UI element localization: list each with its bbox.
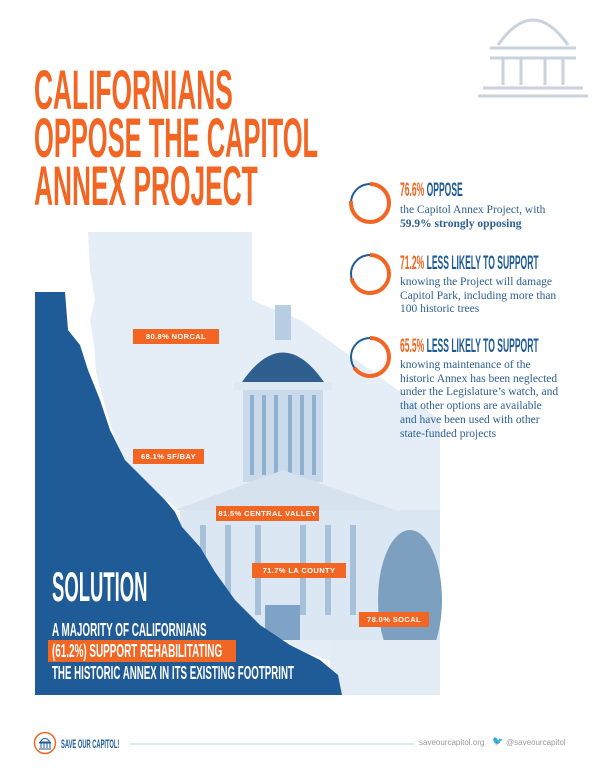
stat 1 xyxy=(349,180,546,230)
stat 2: knowing the Project will damage xyxy=(400,276,552,288)
title xyxy=(34,58,318,217)
stat 2: 71.2% LESS LIKELY TO SUPPORT xyxy=(400,253,539,274)
text: 71.7% LA COUNTY xyxy=(263,566,335,575)
map and capitol illustration xyxy=(35,232,442,695)
text: 78.0% SOCAL xyxy=(367,615,421,624)
solution text xyxy=(48,563,294,683)
stat 1: 76.6% OPPOSE xyxy=(400,180,463,201)
footer: @saveourcapitol xyxy=(506,738,566,747)
title: CALIFORNIANS xyxy=(34,58,233,121)
stat 3: under the Legislature’s watch, and xyxy=(400,386,558,398)
stat 3: historic Annex has been neglected xyxy=(400,373,557,385)
stat 3: and have been used with other xyxy=(400,414,540,426)
stat 3: state-funded projects xyxy=(400,428,496,440)
stat 3: knowing maintenance of the xyxy=(400,359,531,371)
solution text: (61.2%) SUPPORT REHABILITATING xyxy=(52,641,222,661)
solution text: THE HISTORIC ANNEX IN ITS EXISTING FOOTPRINT xyxy=(52,663,294,683)
stat 2 xyxy=(350,253,556,315)
stat 1: the Capitol Annex Project, with xyxy=(400,204,545,216)
region labels: 80.8% NORCAL xyxy=(146,332,206,341)
title: ANNEX PROJECT xyxy=(34,154,258,217)
region labels xyxy=(133,329,219,344)
stat 2: Capitol Park, including more than xyxy=(400,290,556,302)
footer: SAVE OUR CAPITOL! xyxy=(61,737,119,751)
stat 3: 65.5% LESS LIKELY TO SUPPORT xyxy=(400,336,539,357)
footer: 🐦 xyxy=(492,736,503,746)
stat 2: 100 historic trees xyxy=(400,303,479,315)
solution text: SOLUTION xyxy=(52,563,147,610)
solution text: A MAJORITY OF CALIFORNIANS xyxy=(52,620,207,640)
footer xyxy=(34,732,566,754)
stat 1: 59.9% strongly opposing xyxy=(400,218,522,230)
title: OPPOSE THE CAPITOL xyxy=(34,106,318,169)
stat 3 xyxy=(350,336,558,440)
icon: capitol outline top right xyxy=(478,18,588,98)
text: 68.1% SF/BAY xyxy=(141,452,196,461)
text: 81.5% CENTRAL VALLEY xyxy=(218,509,317,518)
footer: saveourcapitol.org xyxy=(419,738,484,747)
icon: logo xyxy=(34,732,56,754)
stat 3: that other options are available xyxy=(400,400,542,412)
